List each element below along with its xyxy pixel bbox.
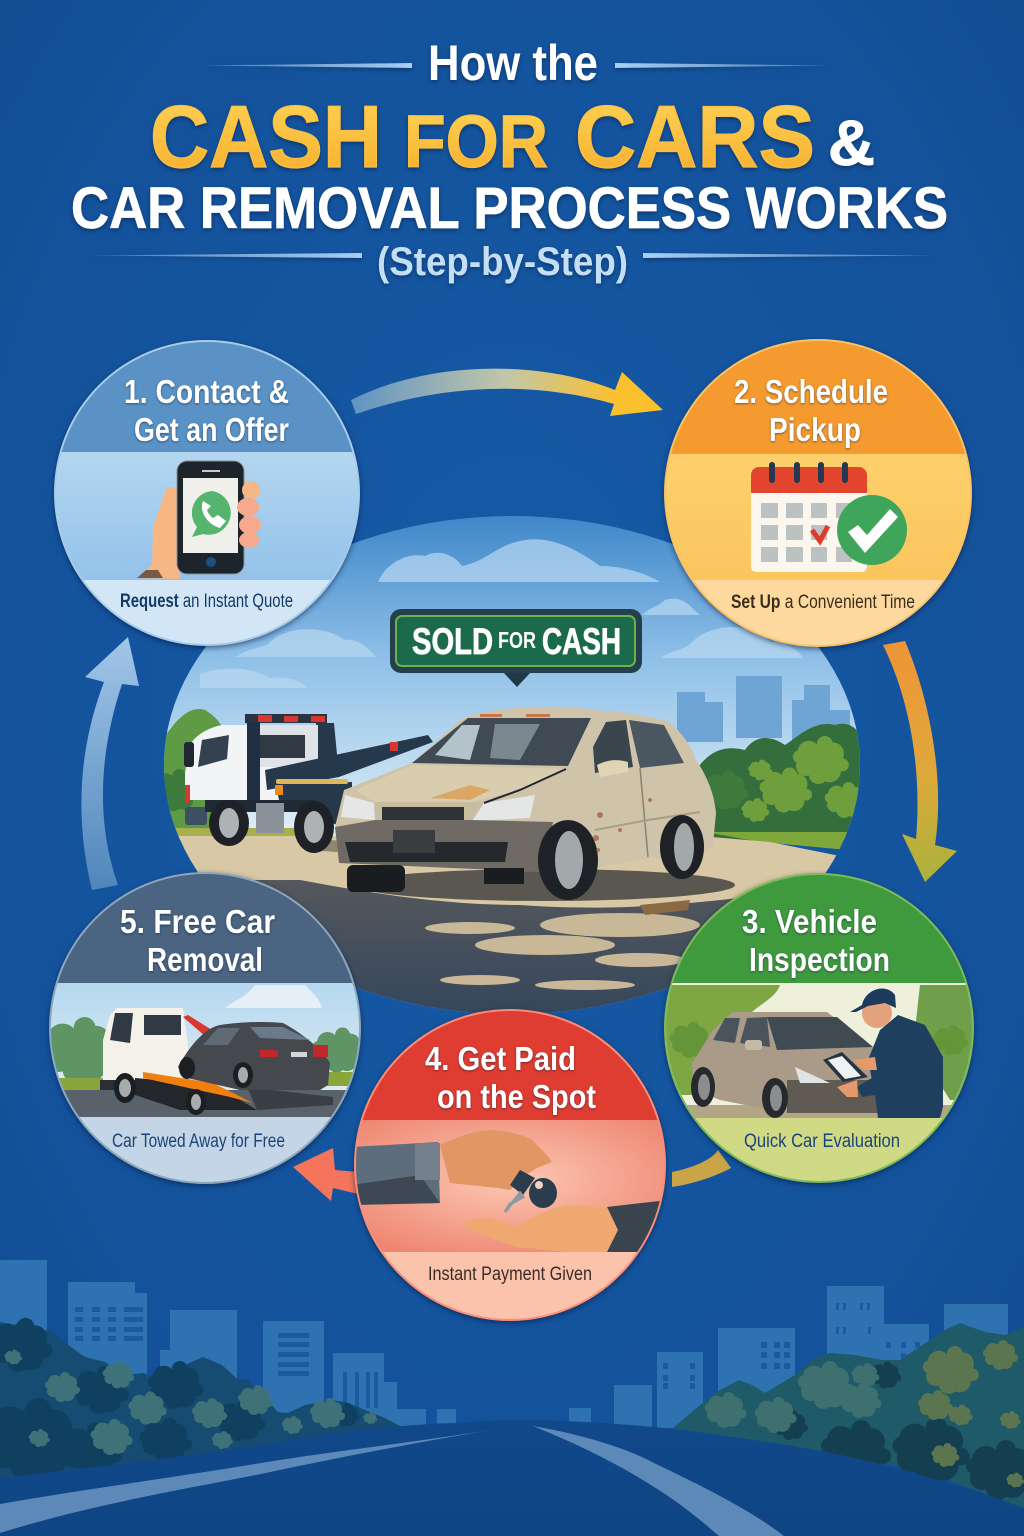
step 3 title: 3. Vehicle bbox=[742, 903, 877, 940]
sold for cash sign: FOR bbox=[498, 627, 536, 653]
grass bbox=[175, 828, 296, 838]
sold for cash sign bbox=[390, 609, 642, 687]
arrow: step 1 to 2 bbox=[351, 369, 663, 416]
icon: hand holding phone bbox=[137, 461, 261, 579]
step 1 title: Get an Offer bbox=[134, 411, 289, 448]
damaged car bbox=[335, 707, 735, 901]
step 5 caption: Car Towed Away for Free bbox=[112, 1131, 285, 1152]
sold for cash sign: SOLD bbox=[412, 621, 493, 662]
step 3 title: Inspection bbox=[749, 941, 890, 978]
step 4 title: on the Spot bbox=[437, 1078, 596, 1115]
step 2 caption: Set Up a Convenient Time bbox=[731, 592, 915, 613]
step 5 title: 5. Free Car bbox=[120, 903, 275, 940]
heading: cash for cars: CASH bbox=[150, 87, 382, 186]
ground bbox=[160, 836, 860, 1020]
step 4 title: 4. Get Paid bbox=[425, 1040, 576, 1077]
ampersand: & bbox=[828, 107, 875, 179]
icon: calendar with check bbox=[751, 462, 907, 572]
heading: cash for cars: CARS bbox=[575, 87, 815, 186]
icon: flatbed tow truck with car bbox=[100, 1008, 333, 1115]
icon: mechanic with tablet bbox=[823, 988, 943, 1118]
skyline silhouette bbox=[0, 1260, 1008, 1429]
arrow: step 5 to 1 bbox=[81, 637, 139, 890]
trees left bbox=[0, 1317, 402, 1482]
step 3 caption: Quick Car Evaluation bbox=[744, 1131, 900, 1152]
step 5 bbox=[41, 870, 365, 1187]
step 1 caption: Request an Instant Quote bbox=[120, 591, 293, 612]
step 4 caption: Instant Payment Given bbox=[428, 1264, 592, 1285]
city bbox=[677, 676, 850, 742]
tow truck bbox=[184, 714, 433, 853]
step 4 bbox=[350, 1005, 670, 1332]
clouds bbox=[200, 539, 803, 688]
heading: car removal process works: CAR REMOVAL PROCESS WORKS bbox=[71, 176, 948, 241]
step 1 title: 1. Contact & bbox=[124, 373, 289, 410]
icon: car under inspection bbox=[691, 1012, 880, 1118]
step 2 title: 2. Schedule bbox=[734, 373, 888, 410]
subheading: (Step-by-Step) bbox=[377, 240, 628, 284]
step 2 title: Pickup bbox=[769, 411, 861, 448]
sold for cash sign: CASH bbox=[542, 621, 621, 662]
arrow: step 4 to 5 bbox=[293, 1148, 358, 1201]
trees right bbox=[673, 1323, 1024, 1508]
arrow: step 3 to 4 bbox=[672, 1150, 731, 1187]
step 2 bbox=[660, 339, 980, 650]
central scene bbox=[41, 339, 980, 1332]
icon: handing over keys bbox=[352, 1130, 668, 1252]
step 3 bbox=[660, 870, 980, 1188]
road bbox=[0, 1420, 1024, 1536]
heading: cash for cars bbox=[150, 87, 815, 186]
arrow: step 2 to 3 bbox=[883, 641, 957, 882]
step 1 bbox=[50, 340, 370, 650]
heading: cash for cars: FOR bbox=[404, 100, 548, 183]
heading: how the: How the bbox=[428, 35, 598, 91]
trees bbox=[151, 709, 867, 840]
step 5 title: Removal bbox=[147, 941, 263, 978]
title bbox=[71, 35, 948, 284]
